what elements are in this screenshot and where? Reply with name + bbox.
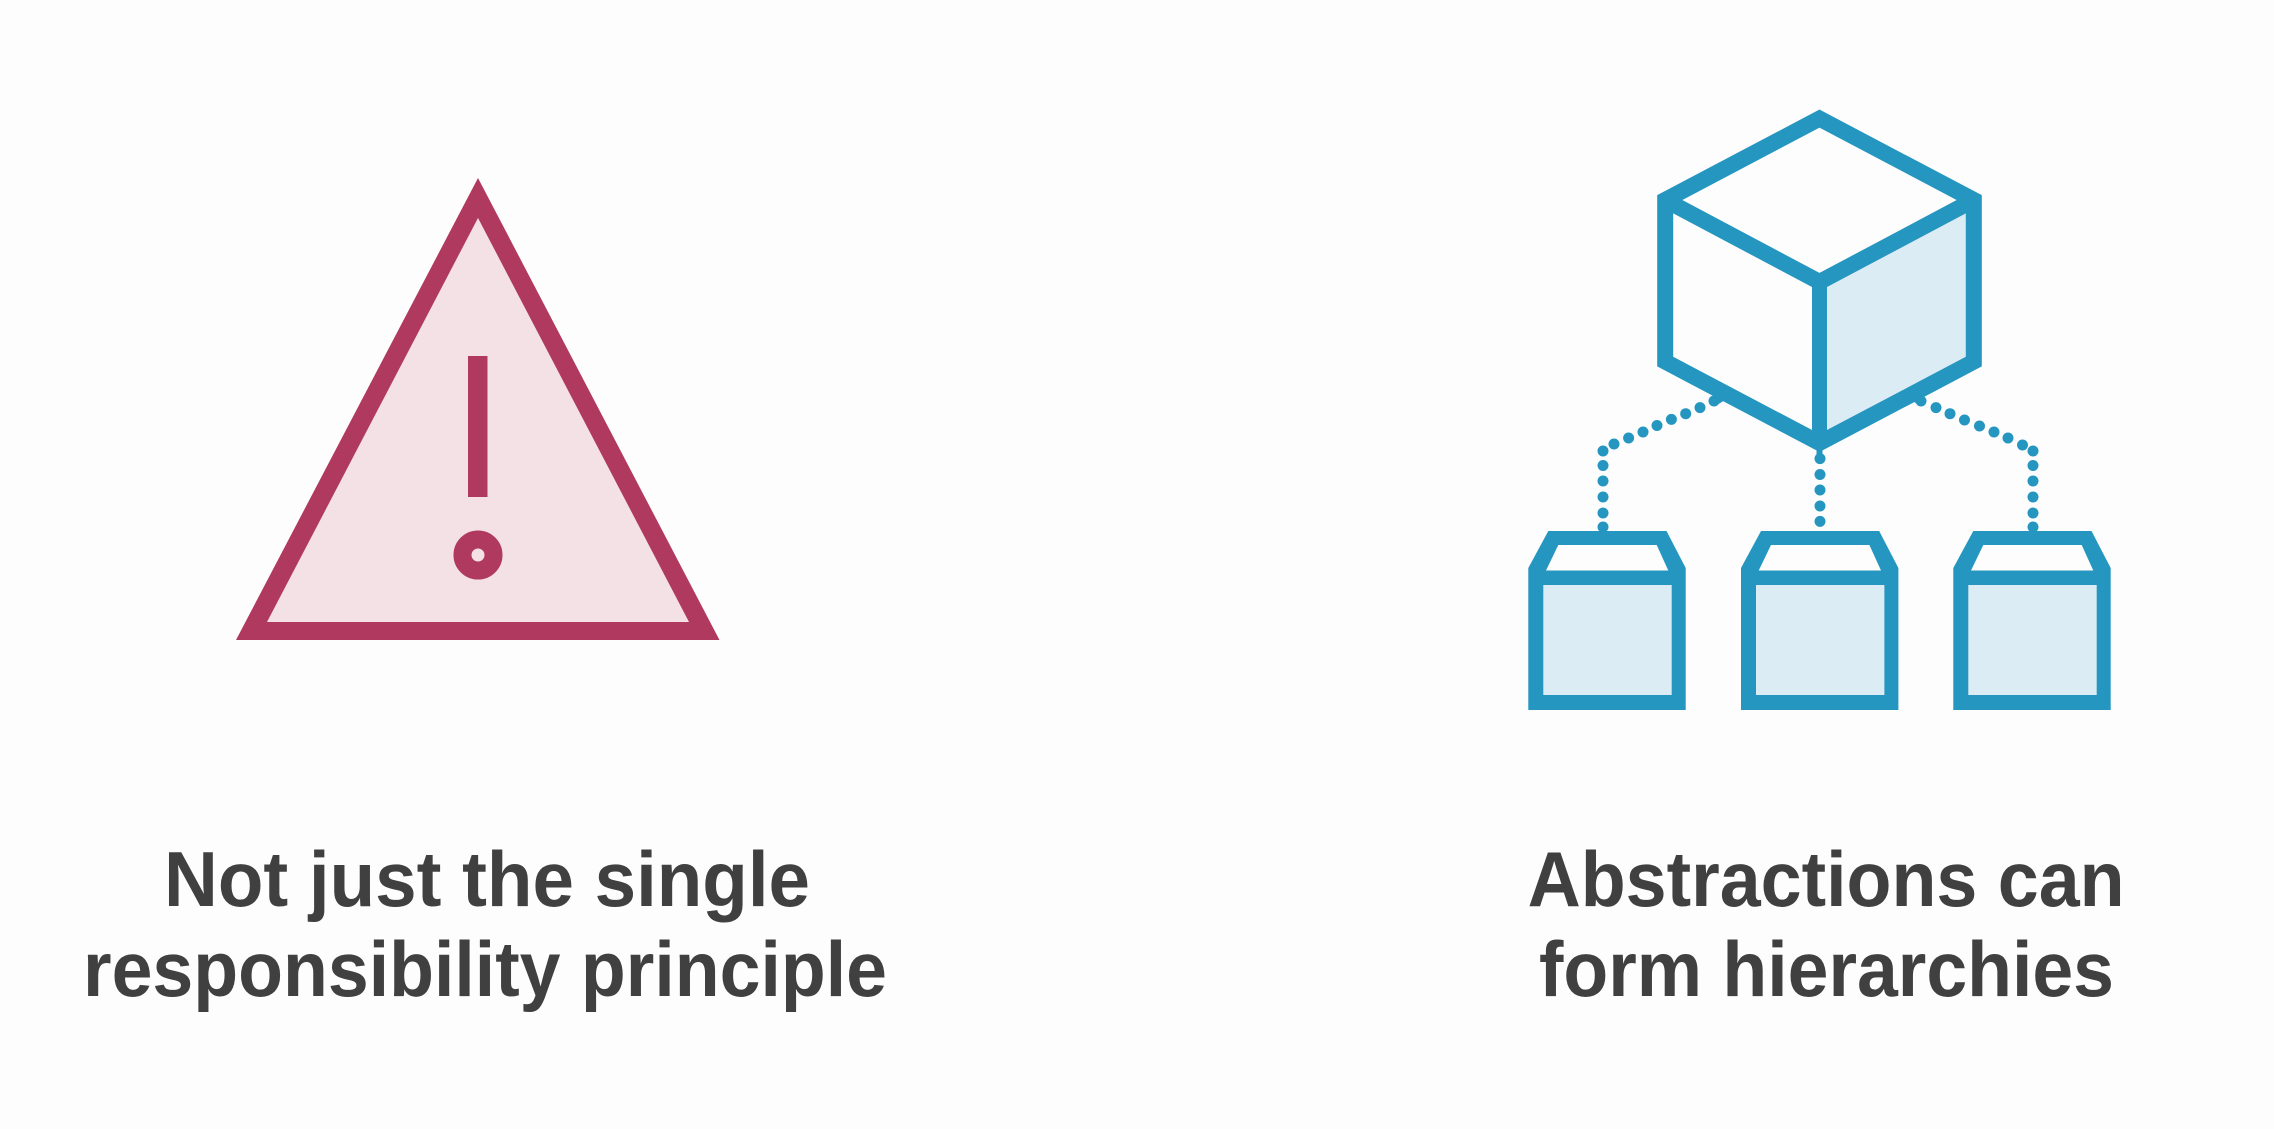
parent cube xyxy=(1665,119,1974,443)
child box: middle xyxy=(1741,531,1898,710)
icon: cube hierarchy xyxy=(1528,119,2111,710)
caption: single responsibility xyxy=(83,835,887,1013)
icon: warning triangle xyxy=(236,178,720,640)
caption: single responsibility: Not just the single xyxy=(164,835,810,923)
child box: left xyxy=(1528,531,1686,710)
child box: right xyxy=(1953,531,2111,710)
caption: hierarchies: form hierarchies xyxy=(1539,925,2114,1013)
caption: hierarchies xyxy=(1528,835,2125,1013)
caption: single responsibility: responsibility principle xyxy=(83,925,887,1013)
dotted connectors xyxy=(1598,393,2038,533)
caption: hierarchies: Abstractions can xyxy=(1528,835,2125,923)
